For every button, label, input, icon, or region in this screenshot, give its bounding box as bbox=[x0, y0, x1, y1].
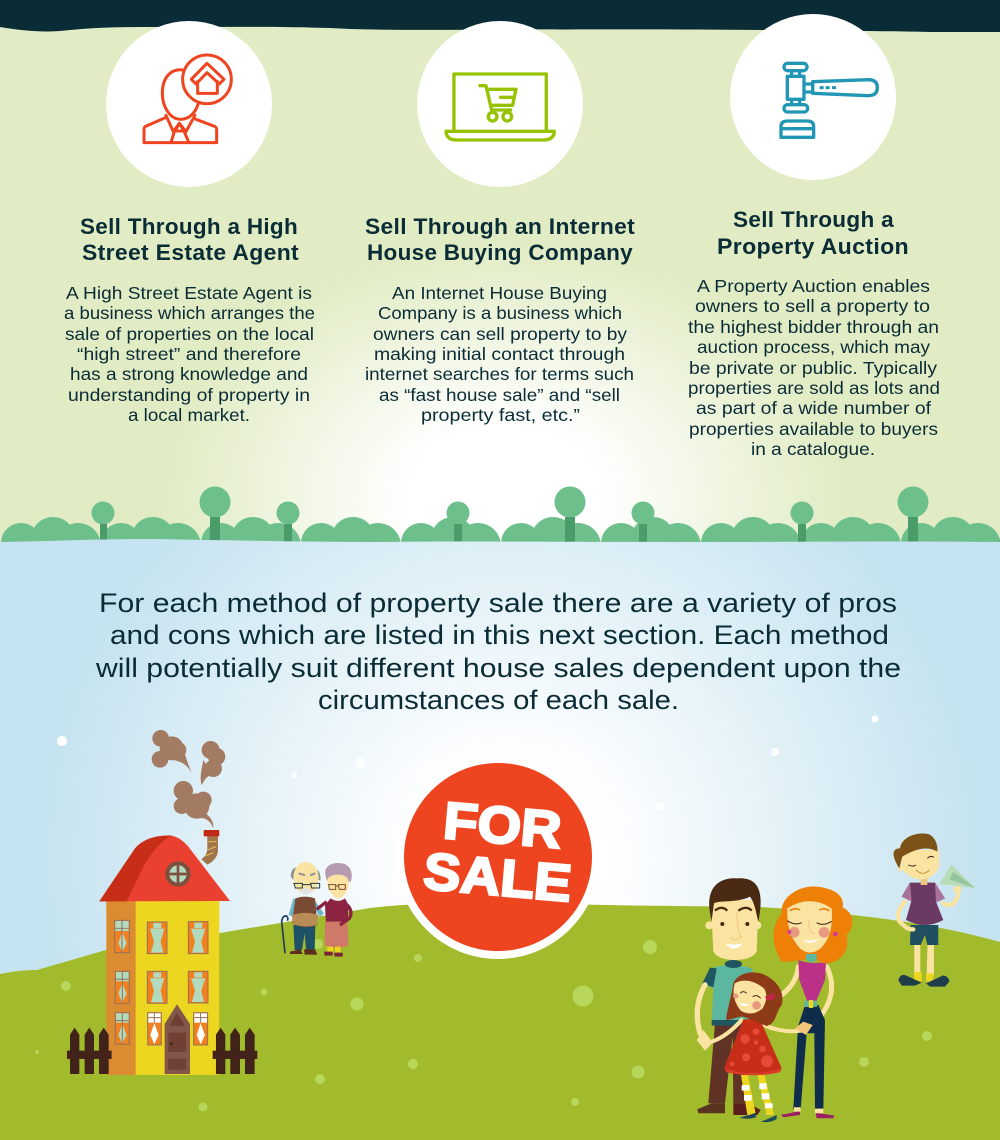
text block: internet house buying: Company is a business which bbox=[378, 303, 622, 323]
heading: property auction bbox=[717, 207, 909, 259]
icon circle: estate agent bbox=[106, 21, 272, 187]
walls bbox=[106, 900, 136, 1075]
text block: estate agent: “high street” and therefore bbox=[77, 344, 301, 364]
text block: property auction: properties are sold as lots and bbox=[688, 378, 940, 398]
door bbox=[165, 1004, 190, 1074]
text block: estate agent: understanding of property in bbox=[68, 385, 310, 405]
icon: laptop with cart bbox=[446, 74, 554, 140]
father legs bbox=[708, 1023, 749, 1103]
icon circle: property auction bbox=[730, 14, 896, 180]
chimney bbox=[201, 836, 218, 865]
text block: internet house buying: internet searches for terms such bbox=[365, 364, 634, 384]
text block: internet house buying: as “fast house sale” and “sell bbox=[379, 385, 620, 405]
panel: blue lower background bbox=[0, 539, 1000, 1140]
text block: internet house buying: owners can sell property to by bbox=[373, 324, 627, 344]
windows bbox=[115, 920, 208, 1045]
round window bbox=[165, 861, 191, 887]
text block: estate agent: has a strong knowledge and bbox=[70, 364, 308, 384]
girl bbox=[712, 1020, 802, 1042]
text block: property auction: as part of a wide number of bbox=[696, 398, 931, 418]
text block: internet house buying: An Internet House Buying bbox=[392, 283, 607, 303]
text block: property auction: be private or public. Typically bbox=[689, 358, 937, 378]
intro paragraph: For each method of property sale there are a variety of pros bbox=[99, 588, 897, 618]
snow dots bbox=[57, 716, 878, 810]
icon circle: internet house buying bbox=[417, 21, 583, 187]
illustration: boy with paper plane bbox=[894, 833, 975, 987]
for sale badge bbox=[396, 755, 600, 959]
green hill bbox=[0, 903, 1000, 1140]
icon: estate agent with house bbox=[144, 55, 231, 143]
text block: estate agent: a business which arranges the bbox=[64, 303, 315, 323]
heading: estate agent: Sell Through a High bbox=[80, 214, 298, 239]
heading: property auction: Property Auction bbox=[717, 234, 909, 259]
hill dots bbox=[35, 939, 932, 1112]
text block: property auction: the highest bidder through an bbox=[688, 317, 939, 337]
heading: internet house buying: House Buying Company bbox=[367, 240, 633, 265]
text block: estate agent: a local market. bbox=[128, 405, 250, 425]
text block: internet house buying: making initial contact through bbox=[374, 344, 625, 364]
illustration: family bbox=[697, 878, 852, 1122]
father torso bbox=[702, 965, 757, 1024]
for sale text: SALE bbox=[421, 843, 574, 913]
text block: internet house buying bbox=[365, 283, 634, 425]
heading: estate agent bbox=[80, 214, 299, 265]
for sale text bbox=[421, 792, 574, 913]
illustration: house with smoke and fence bbox=[67, 730, 257, 1075]
intro paragraph: and cons which are listed in this next section. Each method bbox=[110, 620, 889, 650]
text block: estate agent: sale of properties on the local bbox=[65, 324, 314, 344]
heading: internet house buying: Sell Through an Internet bbox=[365, 214, 635, 239]
text block: estate agent: A High Street Estate Agent is bbox=[66, 283, 312, 303]
grandfather bbox=[289, 898, 299, 917]
dark top band bbox=[0, 0, 1000, 32]
roof bbox=[99, 835, 230, 901]
smoke bbox=[152, 730, 225, 828]
panel: green upper background bbox=[0, 0, 1000, 545]
treeline bbox=[1, 486, 1000, 569]
illustration: elderly couple bbox=[282, 862, 352, 957]
intro paragraph bbox=[95, 588, 901, 715]
father head bbox=[725, 960, 742, 968]
text block: property auction: in a catalogue. bbox=[751, 439, 875, 459]
fence left bbox=[67, 1028, 257, 1074]
heading: internet house buying bbox=[365, 214, 635, 265]
for sale text: FOR bbox=[441, 792, 564, 860]
heading: estate agent: Street Estate Agent bbox=[82, 240, 299, 265]
mother hair and head bbox=[774, 887, 852, 963]
text block: property auction: properties available to buyers bbox=[689, 419, 938, 439]
text block: property auction: auction process, which may bbox=[697, 337, 930, 357]
text block: property auction: owners to sell a property to bbox=[695, 296, 930, 316]
intro paragraph: will potentially suit different house sales dependent upon the bbox=[95, 653, 901, 683]
heading: property auction: Sell Through a bbox=[733, 207, 894, 232]
text block: property auction bbox=[688, 276, 940, 459]
intro paragraph: circumstances of each sale. bbox=[318, 685, 679, 715]
text block: internet house buying: property fast, etc.” bbox=[421, 405, 580, 425]
text block: property auction: A Property Auction enables bbox=[697, 276, 930, 296]
grandmother bbox=[325, 863, 352, 882]
icon: auction gavel bbox=[781, 63, 877, 137]
text block: estate agent bbox=[64, 283, 315, 425]
mother bbox=[805, 967, 832, 1030]
